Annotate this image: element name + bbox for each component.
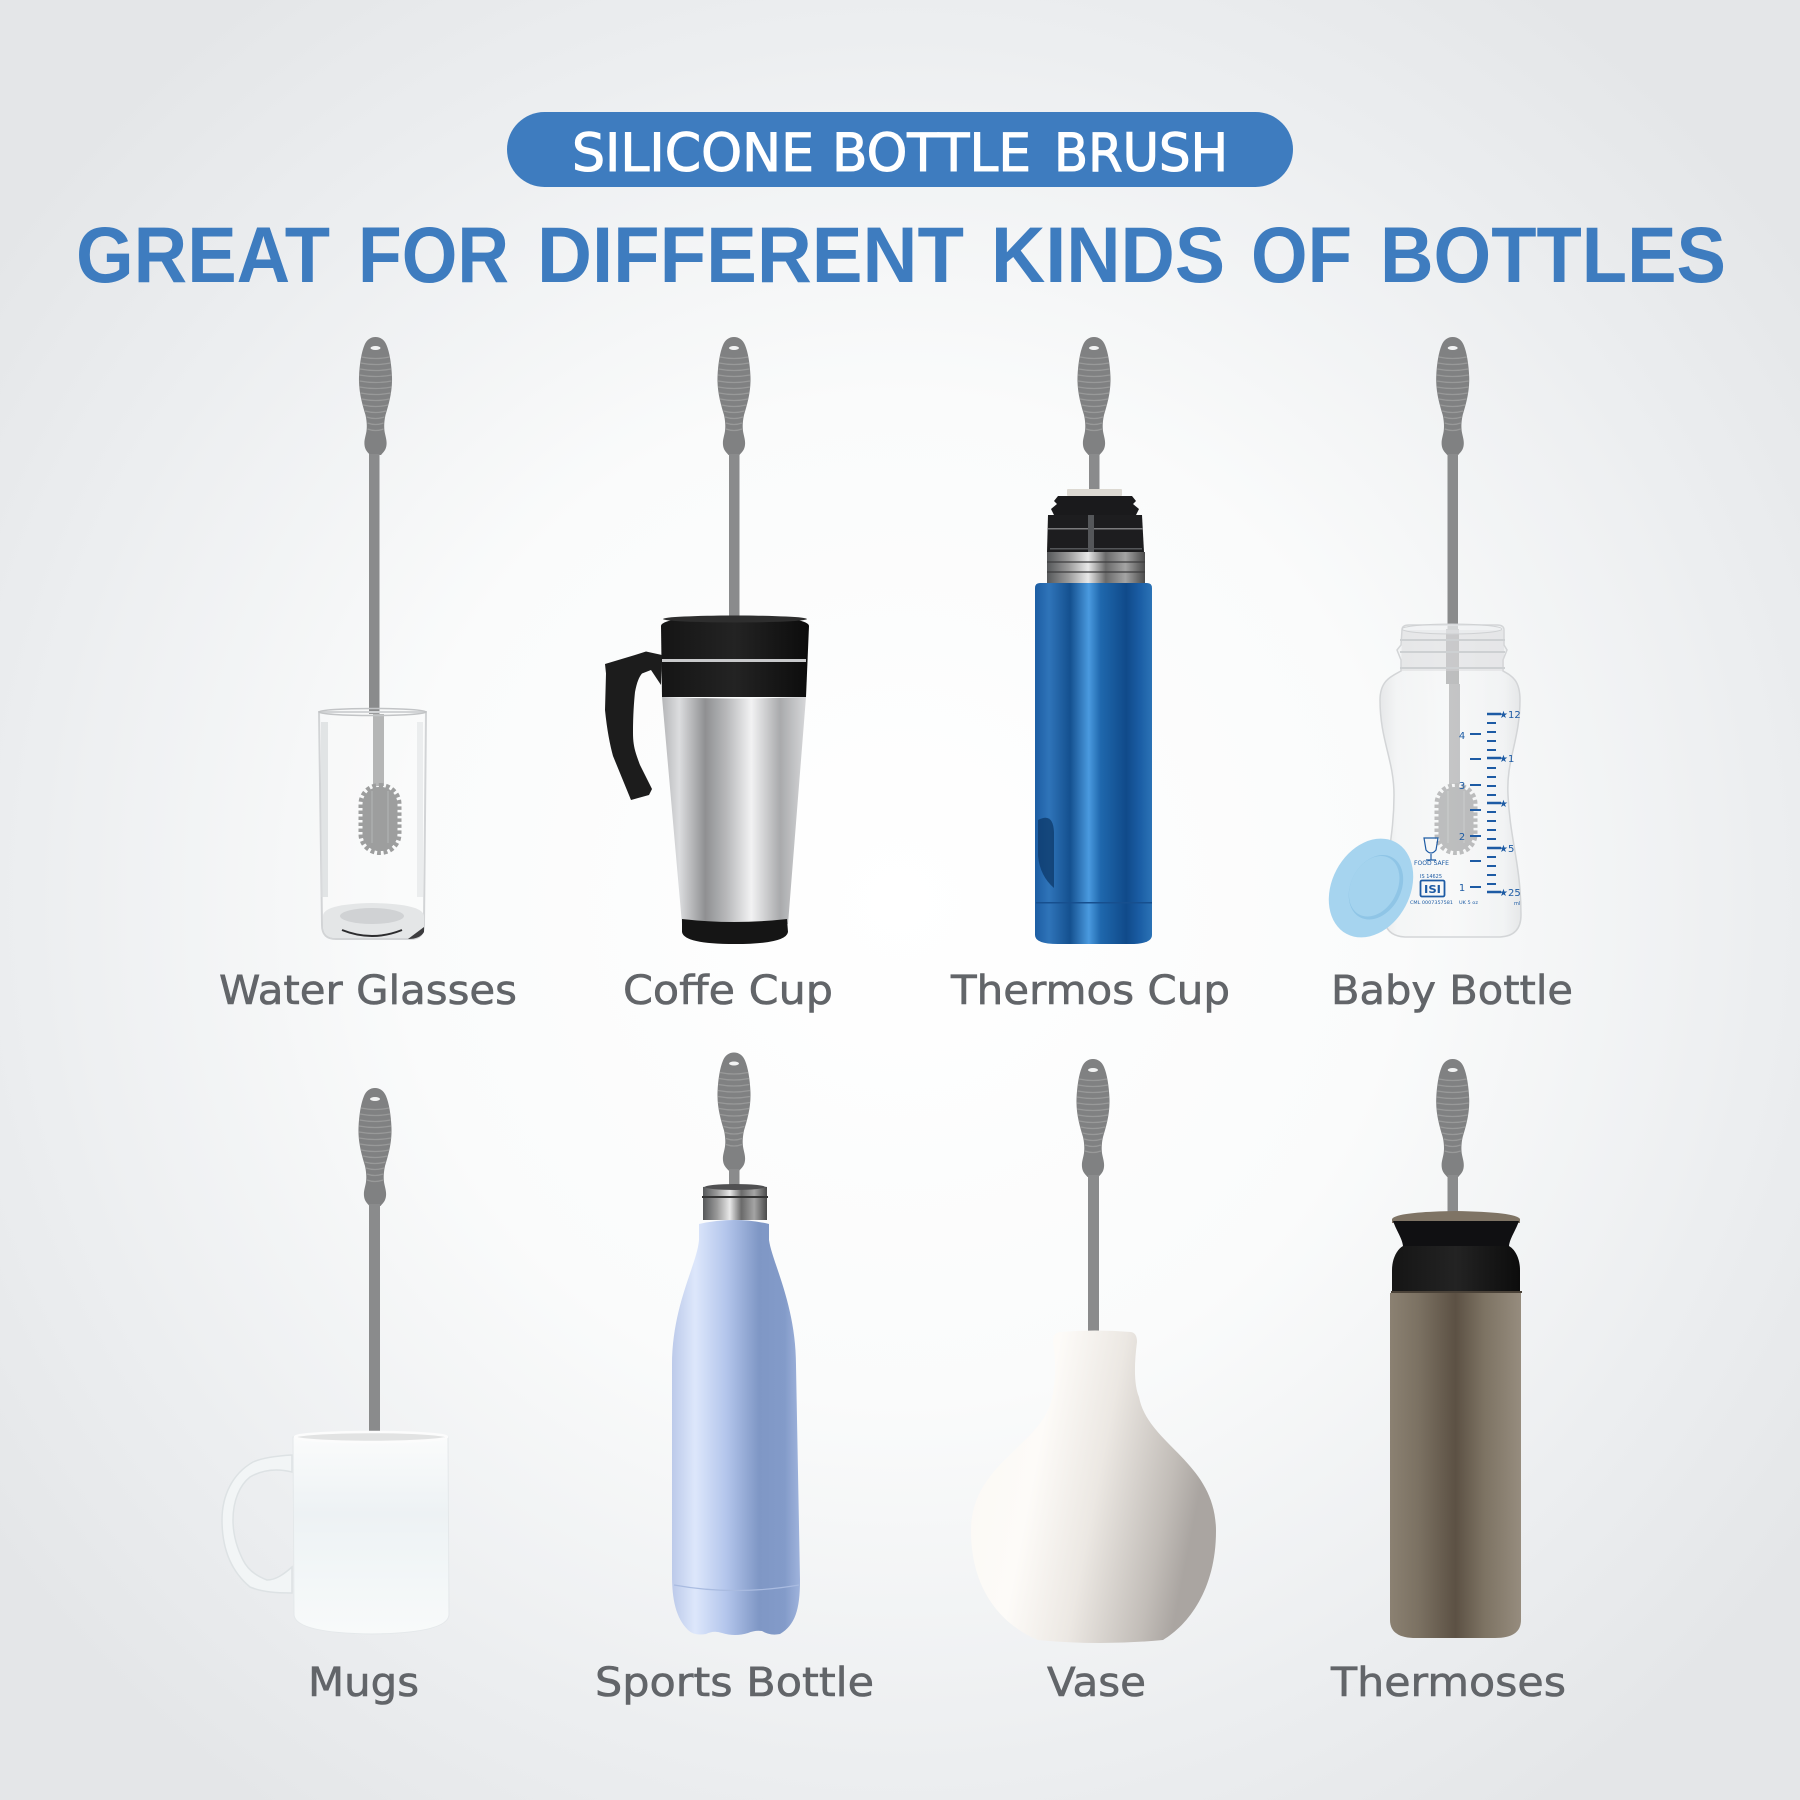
scale markings: FOOD SAFE (1414, 859, 1449, 867)
item: baby bottle (1312, 337, 1573, 1014)
bottle cap (1312, 824, 1430, 952)
badge: silicone bottle brush: BOTTLE (832, 123, 1031, 184)
icon: taupe flask (1390, 1211, 1522, 1638)
label: Baby Bottle (1331, 968, 1573, 1014)
item: mugs (222, 1088, 449, 1706)
scale markings: ★1 (1499, 754, 1514, 765)
brush (717, 1052, 751, 1187)
item: coffee cup (605, 337, 833, 1014)
scale markings: ★5 (1499, 844, 1514, 855)
label: Sports Bottle (595, 1660, 874, 1706)
scale markings: ★12 (1499, 710, 1521, 721)
scale markings: 1 (1459, 883, 1465, 894)
icon: baby bottle (1312, 624, 1521, 952)
title: DIFFERENT (537, 210, 964, 299)
label: Water Glasses (219, 968, 517, 1014)
title: KINDS (991, 210, 1225, 299)
badge: silicone bottle brush (507, 112, 1293, 187)
scale markings: ★ (1499, 799, 1508, 810)
title: OF (1251, 210, 1352, 299)
scale markings: CML 0007357581 (1410, 900, 1453, 906)
item: vase (971, 1059, 1216, 1706)
icon: ceramic vase (971, 1330, 1216, 1643)
brush (1076, 1059, 1110, 1333)
scale markings: IS 14625 (1420, 874, 1442, 880)
item: water glasses (219, 337, 517, 1014)
brush (717, 337, 751, 619)
scale markings: ★25 (1499, 888, 1521, 899)
label: Thermos Cup (950, 968, 1230, 1014)
title: FOR (358, 210, 509, 299)
brush (358, 1088, 392, 1440)
item: thermoses (1330, 1059, 1566, 1706)
badge: silicone bottle brush: SILICONE (572, 123, 814, 184)
icon: blue thermos (1035, 489, 1152, 944)
label: Thermoses (1330, 1660, 1566, 1706)
icon: travel mug (605, 616, 809, 944)
brush (1077, 337, 1111, 490)
scale markings: 4 (1459, 731, 1465, 742)
brush (1436, 337, 1474, 851)
scale markings: 2 (1459, 832, 1465, 843)
brush (1436, 1059, 1469, 1213)
item: thermos cup (950, 337, 1230, 1014)
badge: silicone bottle brush: BRUSH (1054, 123, 1228, 184)
scale markings: 3 (1459, 781, 1465, 792)
icon: periwinkle bottle (672, 1184, 800, 1635)
label: Vase (1047, 1660, 1146, 1706)
item: sports bottle (595, 1052, 874, 1706)
title: BOTTLES (1380, 210, 1726, 299)
scale markings: UK 5 oz (1459, 900, 1479, 906)
label: Coffe Cup (623, 968, 833, 1014)
title: GREAT (76, 210, 330, 299)
label: Mugs (308, 1660, 419, 1706)
icon: drinking glass (319, 708, 426, 939)
scale markings: ISI (1424, 883, 1441, 896)
brush in glass (359, 337, 398, 851)
icon: white mug (222, 1432, 449, 1634)
scale markings (1410, 710, 1521, 907)
scale markings: ml (1514, 901, 1520, 907)
